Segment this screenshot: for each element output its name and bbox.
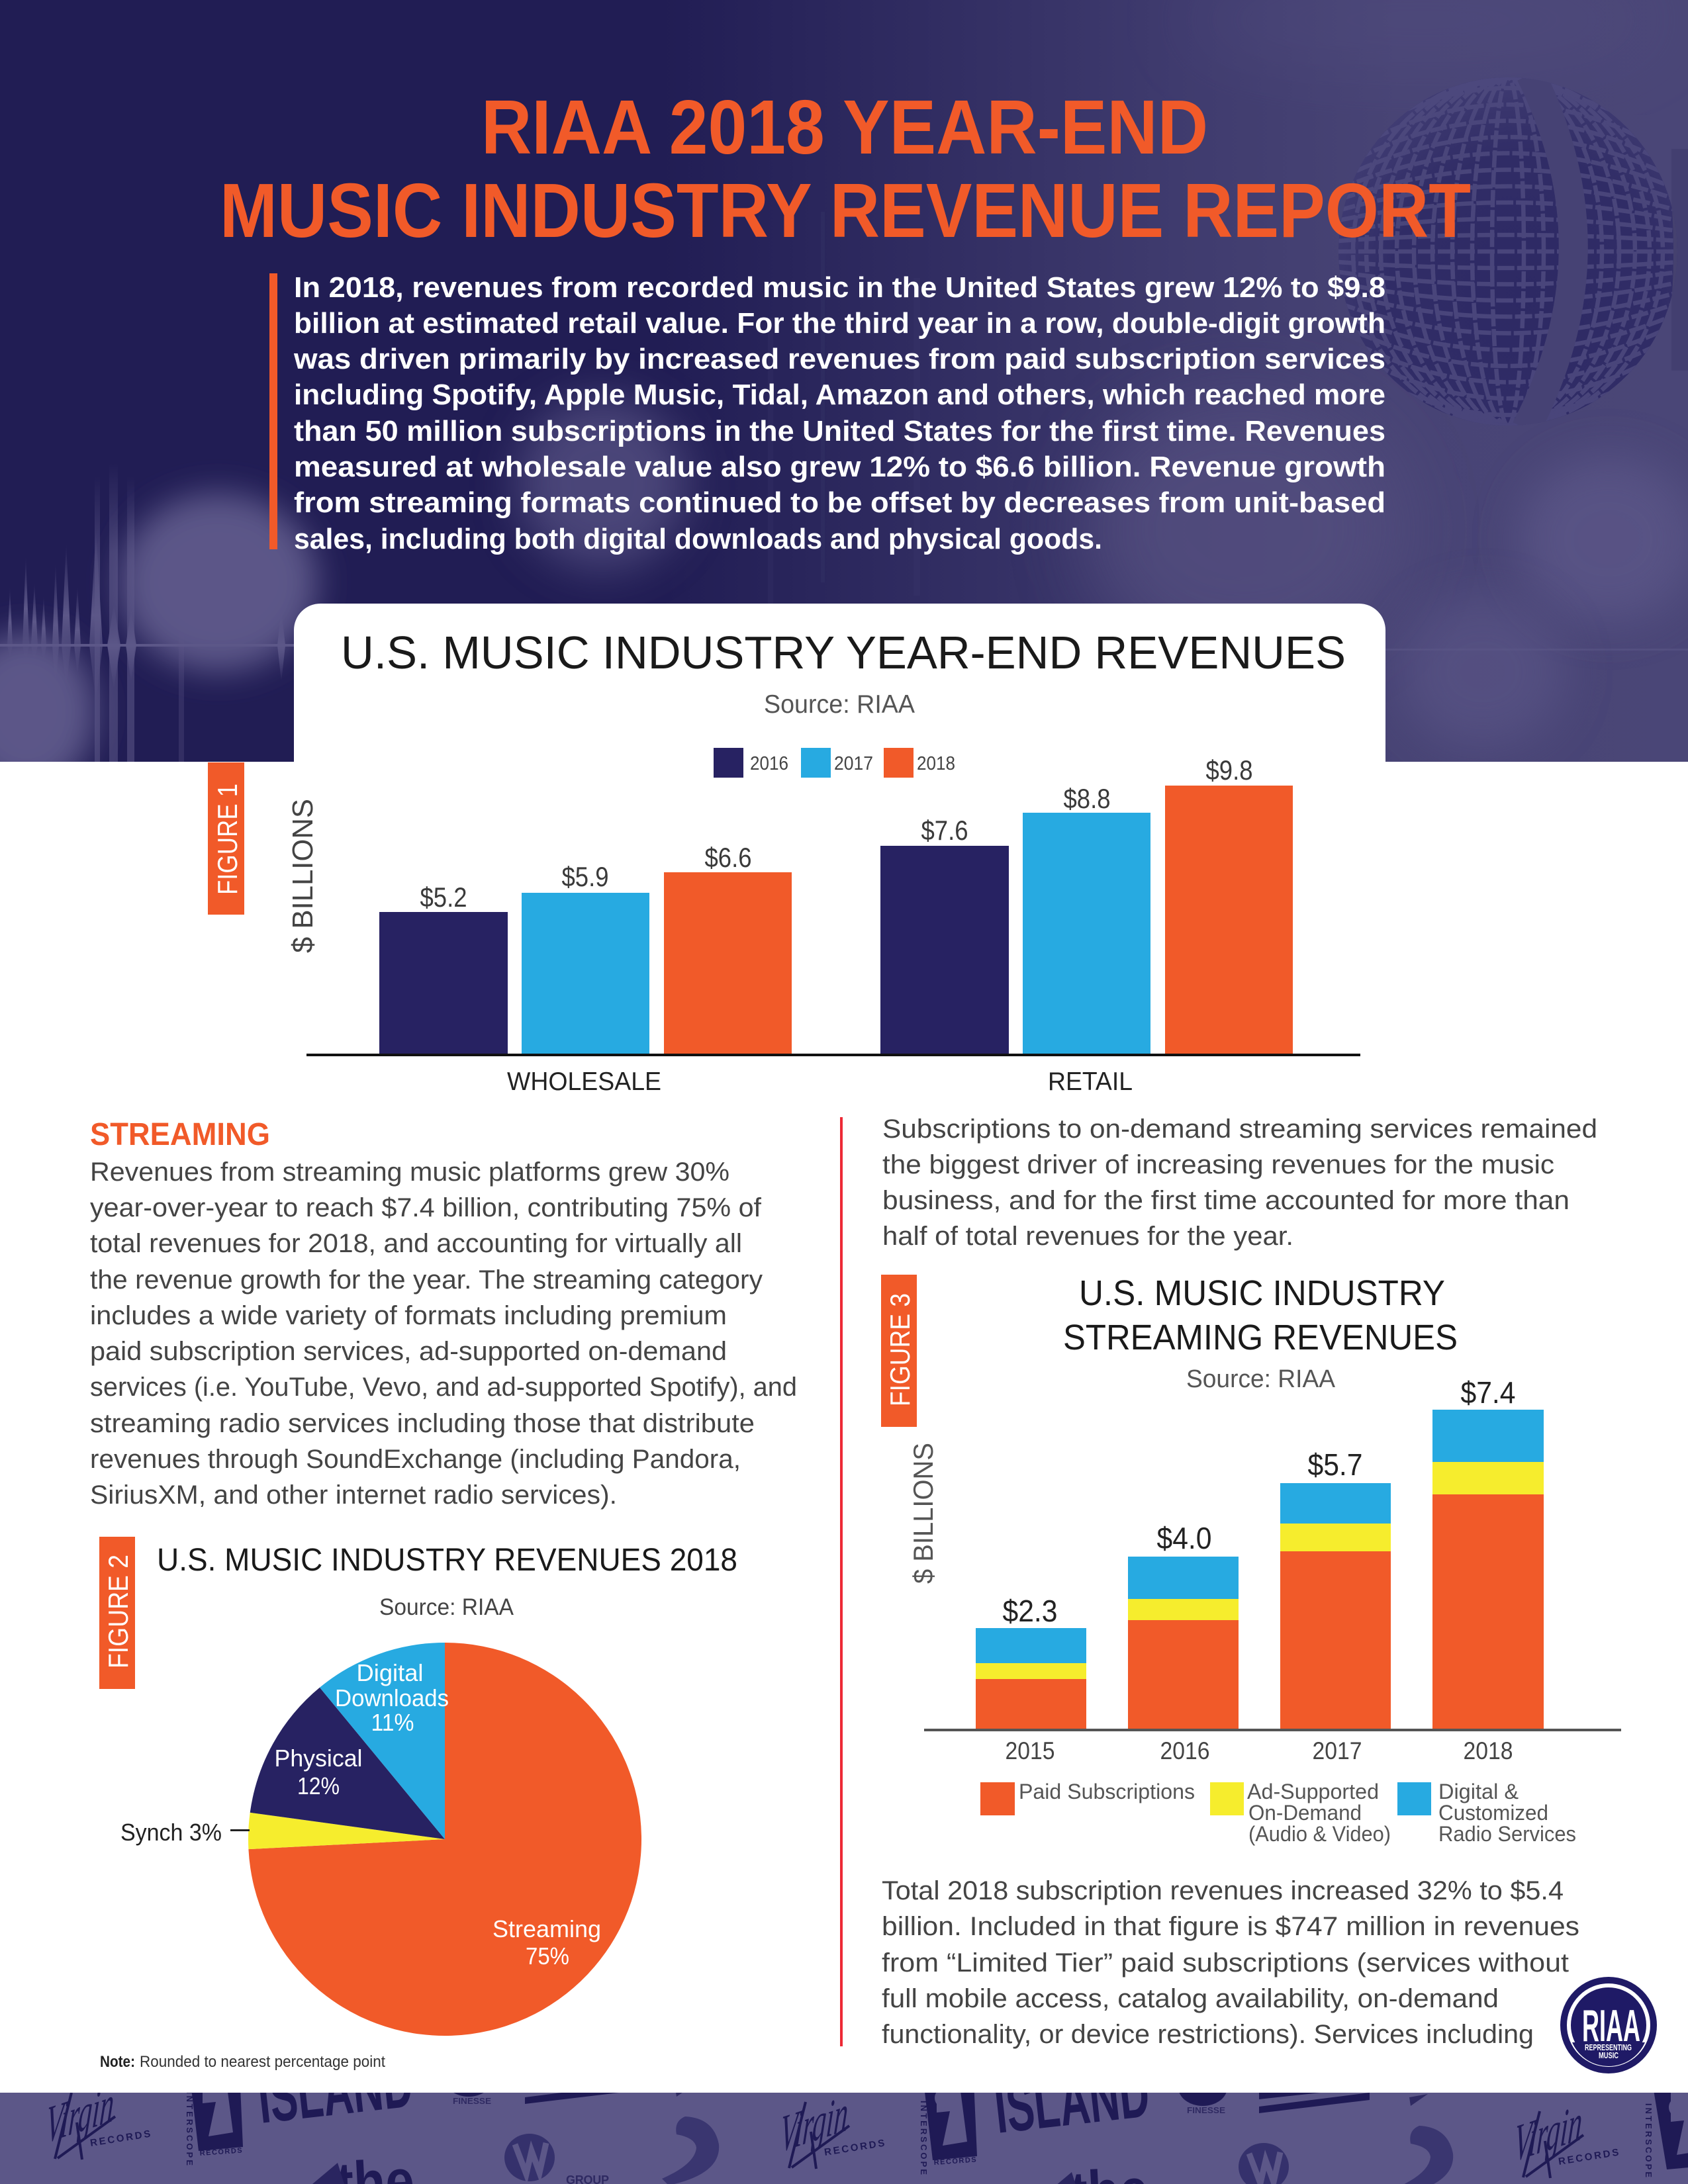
pie chart: revenue share: Digital (356, 1659, 424, 1686)
streaming paragraph: paid subscription services, ad-supported on-demand (90, 1337, 727, 1366)
right column closing paragraph: functionality, or device restrictions). Services including (882, 2020, 1534, 2049)
bar chart: year-end revenues: $9.8 (1206, 754, 1252, 786)
pie chart: revenue share: Physical (274, 1745, 363, 1772)
logo repeat 3: INTERSCOPE (1644, 2103, 1654, 2177)
intro paragraph: measured at wholesale value also grew 12% to $6.6 billion. Revenue growth (294, 451, 1385, 483)
figure 1 legend: 2018 (917, 753, 955, 774)
streaming paragraph: revenues through SoundExchange (including Pandora, (90, 1445, 741, 1474)
title: MUSIC INDUSTRY REVENUE REPORT (220, 167, 1471, 253)
logo repeat 2: RECORDS (823, 2138, 885, 2158)
pie chart: revenue share (120, 1643, 641, 2036)
streaming paragraph: the revenue growth for the year. The streaming category (90, 1265, 763, 1295)
figure 3 legend (980, 1780, 1576, 1846)
logo repeat 2: RECORDS (933, 2156, 976, 2167)
bar chart: year-end revenues: WHOLESALE (507, 1068, 661, 1096)
icon: RIAA logo: REPRESENTING (1585, 2042, 1632, 2052)
stacked bar chart: streaming revenues: 2015 (1005, 1737, 1055, 1764)
figure 3 legend: Customized (1438, 1801, 1548, 1825)
waveform streaks (0, 212, 920, 762)
pie chart: revenue share: 11% (371, 1709, 414, 1736)
bar chart: year-end revenues: $5.9 (561, 861, 609, 892)
logo repeat 2: ISLAND (991, 2054, 1153, 2148)
figure 3 heading: Source: RIAA (1186, 1365, 1336, 1393)
streaming paragraph: includes a wide variety of formats including premium (90, 1301, 727, 1330)
bar chart: year-end revenues: $6.6 (704, 842, 752, 873)
logo repeat 1: FINESSE (453, 2096, 491, 2106)
streaming paragraph: Revenues from streaming music platforms grew 30% (90, 1158, 729, 1187)
right column intro paragraph (882, 1115, 1597, 1251)
logo repeat 3: Virgin (1513, 2093, 1584, 2174)
figure 1 legend: 2016 (750, 753, 788, 774)
pie chart: revenue share: Streaming (492, 1915, 601, 1942)
streaming paragraph: year-over-year to reach $7.4 billion, contributing 75% of (90, 1193, 762, 1222)
bar chart: year-end revenues (306, 754, 1360, 1096)
stacked bar chart: streaming revenues: 2018 (1463, 1737, 1513, 1764)
right column closing paragraph: billion. Included in that figure is $747 million in revenues (882, 1912, 1579, 1941)
column divider (840, 1117, 843, 2046)
title (220, 84, 1471, 253)
icon: RIAA logo (1560, 1977, 1657, 2073)
heading: streaming: STREAMING (90, 1117, 270, 1152)
logo repeat 3 (1513, 2090, 1688, 2178)
logo repeat 1 (44, 2044, 719, 2184)
figure 2 heading: U.S. MUSIC INDUSTRY REVENUES 2018 (157, 1543, 737, 1578)
figure 3 heading: STREAMING REVENUES (1063, 1318, 1458, 1357)
streaming paragraph: total revenues for 2018, and accounting for virtually all (90, 1229, 742, 1258)
pie chart: revenue share: Synch 3% (120, 1819, 222, 1846)
right column intro paragraph: Subscriptions to on-demand streaming services remained (882, 1115, 1597, 1144)
stacked bar chart: streaming revenues: $4.0 (1157, 1521, 1211, 1555)
microphone (1338, 71, 1688, 432)
intro paragraph: than 50 million subscriptions in the United States for the first time. Revenues (294, 415, 1385, 447)
figure 3 legend: (Audio & Video) (1248, 1822, 1391, 1846)
figure 3 heading (1063, 1273, 1458, 1393)
figure 2 heading: Source: RIAA (379, 1594, 514, 1620)
right column intro paragraph: the biggest driver of increasing revenues for the music (882, 1150, 1554, 1179)
note: Rounded to nearest percentage point (140, 2053, 385, 2071)
bar chart: year-end revenues: $8.8 (1063, 783, 1111, 814)
footer record label logos (44, 2044, 1688, 2184)
footer band (0, 2093, 1688, 2184)
logo repeat 2: INTERSCOPE (919, 2101, 929, 2175)
figure 1 axis label: $ BILLIONS (287, 799, 319, 953)
streaming paragraph: SiriusXM, and other internet radio services). (90, 1480, 617, 1510)
bar chart: year-end revenues: RETAIL (1048, 1068, 1133, 1096)
bar chart: year-end revenues: $7.6 (921, 815, 968, 846)
intro paragraph: including Spotify, Apple Music, Tidal, Amazon and others, which reached more (294, 379, 1385, 411)
intro paragraph: In 2018, revenues from recorded music in the United States grew 12% to $9.8 (294, 271, 1385, 304)
figure 1 tag: FIGURE 1 (212, 784, 243, 895)
right column closing paragraph: full mobile access, catalog availability, on-demand (882, 1984, 1499, 2013)
logo repeat 3: RECORDS (1558, 2147, 1619, 2167)
logo repeat 1: RECORDS (89, 2128, 151, 2149)
figure 1 heading (341, 627, 1346, 719)
figure 1 heading: Source: RIAA (764, 690, 915, 719)
panel: figure 1 white card (294, 604, 1385, 762)
stacked bar chart: streaming revenues: $7.4 (1460, 1375, 1516, 1410)
intro paragraph (293, 271, 1385, 555)
logo repeat 2: Virgin (778, 2083, 850, 2165)
figure 3 legend: Radio Services (1438, 1822, 1576, 1846)
figure 3 legend: On-Demand (1248, 1801, 1362, 1825)
intro paragraph: sales, including both digital downloads and physical goods. (294, 523, 1102, 555)
pie chart: revenue share: Downloads (335, 1684, 449, 1711)
intro paragraph: from streaming formats continued to be offset by decreases from unit-based (294, 486, 1385, 519)
figure 1 legend: 2017 (834, 753, 873, 774)
pie chart: revenue share: 12% (297, 1772, 340, 1799)
logo repeat 1: INTERSCOPE (185, 2091, 195, 2165)
intro accent bar (269, 273, 277, 549)
right column closing paragraph (882, 1876, 1579, 2049)
figure 3 legend: Paid Subscriptions (1019, 1780, 1195, 1803)
figure 2 tag: FIGURE 2 (103, 1555, 134, 1668)
figure 3 legend: Digital & (1438, 1780, 1519, 1803)
stacked bar chart: streaming revenues: 2016 (1160, 1737, 1210, 1764)
figure 3 legend: Ad-Supported (1247, 1780, 1379, 1803)
title: RIAA 2018 YEAR-END (481, 84, 1208, 170)
header background (0, 0, 1688, 791)
logo repeat 2: FINESSE (1187, 2105, 1225, 2115)
intro paragraph: was driven primarily by increased revenues from paid subscription services (293, 343, 1385, 375)
icon: RIAA logo: MUSIC (1599, 2050, 1618, 2060)
bar chart: year-end revenues: $5.2 (420, 882, 467, 913)
right column closing paragraph: from “Limited Tier” paid subscriptions (services without (882, 1948, 1569, 1978)
stacked bar chart: streaming revenues: $5.7 (1308, 1447, 1362, 1482)
logo repeat 1: RECORDS (199, 2147, 242, 2158)
streaming paragraph: streaming radio services including those that distribute (90, 1409, 755, 1438)
figure 1 heading: U.S. MUSIC INDUSTRY YEAR-END REVENUES (341, 627, 1346, 678)
pie chart: revenue share: 75% (526, 1942, 569, 1970)
right column intro paragraph: half of total revenues for the year. (882, 1222, 1293, 1251)
figure 3 axis label: $ BILLIONS (908, 1443, 939, 1584)
right column intro paragraph: business, and for the first time accounted for more than (882, 1186, 1570, 1215)
intro paragraph: billion at estimated retail value. For the third year in a row, double-digit growth (294, 307, 1385, 340)
streaming paragraph (90, 1158, 797, 1510)
figure 1 legend (714, 748, 955, 778)
right column closing paragraph: Total 2018 subscription revenues increased 32% to $5.4 (882, 1876, 1564, 1905)
stacked bar chart: streaming revenues: 2017 (1312, 1737, 1362, 1764)
stacked bar chart: streaming revenues: $2.3 (1002, 1594, 1058, 1628)
logo repeat 1: ISLAND (254, 2044, 416, 2138)
stacked bar chart: streaming revenues (924, 1375, 1621, 1764)
figure 3 tag: FIGURE 3 (884, 1293, 915, 1406)
note: Note: (100, 2053, 135, 2071)
logo repeat 1: Virgin (44, 2074, 116, 2156)
figure 2 heading (157, 1543, 737, 1620)
logo repeat 2 (778, 2054, 1453, 2184)
streaming paragraph: services (i.e. YouTube, Vevo, and ad-supported Spotify), and (90, 1373, 797, 1402)
figure 3 heading: U.S. MUSIC INDUSTRY (1079, 1273, 1445, 1313)
